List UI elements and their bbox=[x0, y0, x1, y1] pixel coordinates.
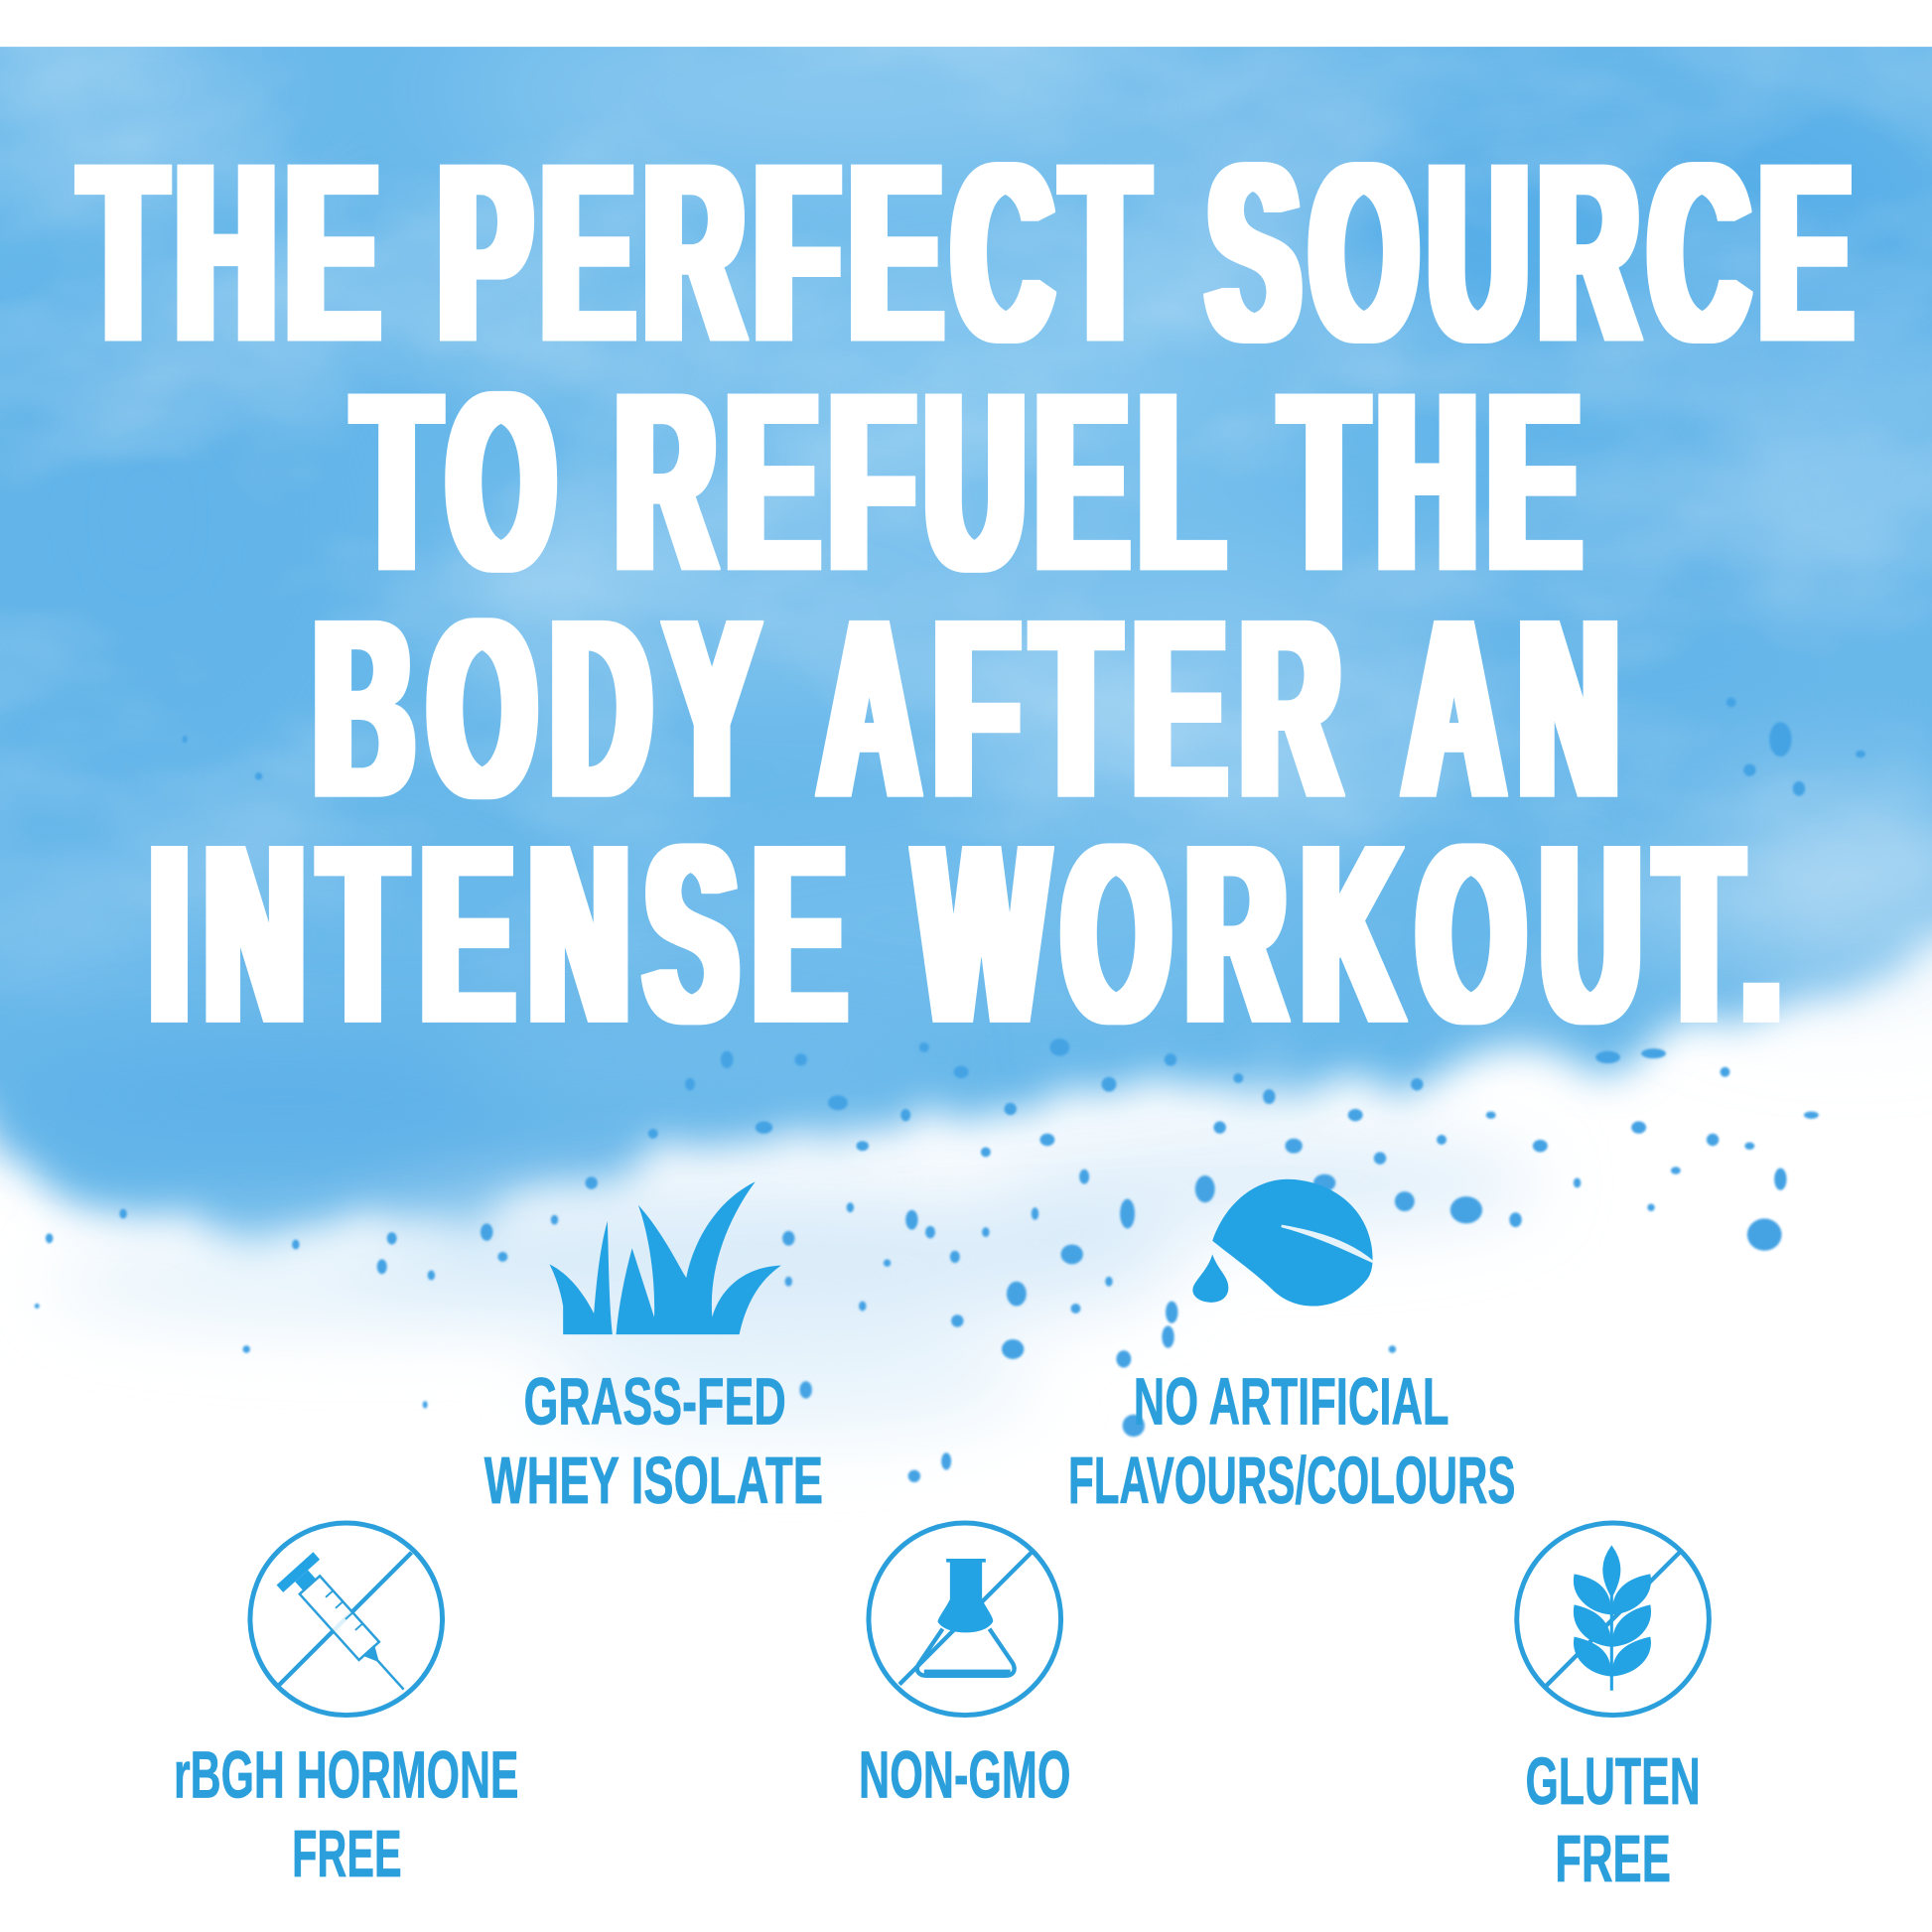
label: rBGH hormone free: rBGH HORMONE bbox=[174, 1738, 518, 1813]
headline bbox=[81, 110, 1852, 1076]
icon: no hormone syringe bbox=[250, 1523, 443, 1716]
label: grass-fed whey isolate: WHEY ISOLATE bbox=[484, 1444, 823, 1518]
label: rBGH hormone free bbox=[174, 1738, 518, 1891]
icon: grass bbox=[550, 1181, 781, 1334]
label: gluten free bbox=[1525, 1744, 1701, 1896]
watercolour powder background bbox=[0, 0, 1932, 1436]
headline: THE PERFECT SOURCE bbox=[81, 110, 1852, 394]
icon: leaf with drop bbox=[1192, 1179, 1373, 1307]
label: gluten free: FREE bbox=[1555, 1822, 1671, 1896]
icon: non-GMO flask bbox=[869, 1523, 1061, 1716]
headline: INTENSE WORKOUT. bbox=[150, 791, 1780, 1076]
label: grass-fed whey isolate bbox=[484, 1365, 823, 1518]
icon: gluten free wheat bbox=[1517, 1523, 1709, 1716]
headline: BODY AFTER AN bbox=[314, 566, 1618, 850]
headline: TO REFUEL THE bbox=[354, 340, 1580, 623]
label: gluten free: GLUTEN bbox=[1525, 1744, 1701, 1819]
label: non-GMO: NON-GMO bbox=[859, 1738, 1070, 1813]
label: no artificial flavours/colours: FLAVOURS/COLOURS bbox=[1068, 1444, 1516, 1518]
label: rBGH hormone free: FREE bbox=[292, 1817, 402, 1891]
label: no artificial flavours/colours: NO ARTIFICIAL bbox=[1134, 1365, 1449, 1440]
label: no artificial flavours/colours bbox=[1068, 1365, 1516, 1518]
paint splatter specks bbox=[35, 697, 1865, 1482]
label: grass-fed whey isolate: GRASS-FED bbox=[523, 1365, 786, 1440]
